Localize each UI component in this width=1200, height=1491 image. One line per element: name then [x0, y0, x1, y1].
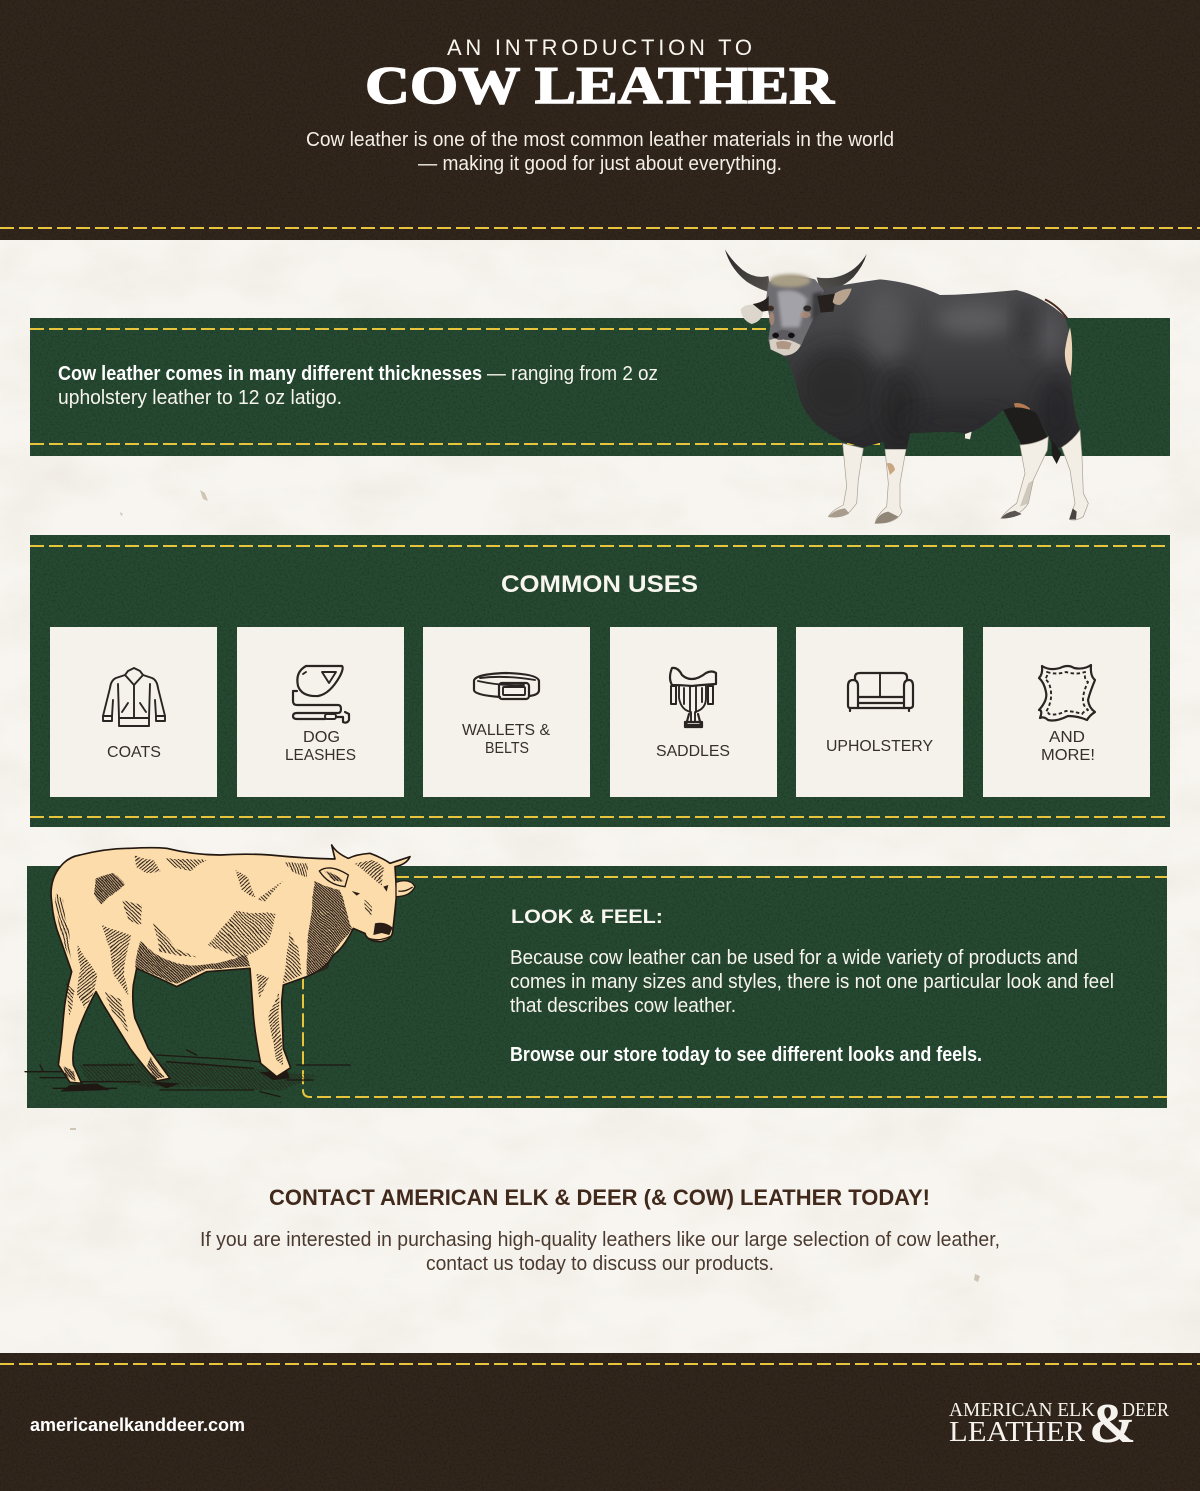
panel: header: [0, 0, 1200, 240]
look and feel body text: [510, 947, 1114, 1066]
paper background: [0, 240, 1200, 1353]
panel: footer: [0, 1353, 1200, 1491]
icon: jacket: [103, 668, 165, 726]
title: COW LEATHER: [365, 57, 835, 115]
card: dog leashes: [237, 627, 404, 797]
card: coats: [50, 627, 217, 797]
label: wallets and belts: WALLETS &: [462, 722, 550, 739]
hind leg right: [1062, 430, 1088, 520]
heading: look and feel: LOOK & FEEL:: [511, 907, 663, 928]
look and feel body text: Browse our store today to see different looks and feels.: [510, 1044, 982, 1066]
contact text: If you are interested in purchasing high-quality leathers like our large selection of cow leather,: [200, 1229, 1000, 1251]
look and feel body text: Because cow leather can be used for a wide variety of products and: [510, 947, 1078, 969]
panel: thickness: [30, 318, 1170, 456]
icon: belt: [474, 673, 539, 699]
panel: common uses: [30, 535, 1170, 827]
label: wallets and belts: BELTS: [485, 740, 529, 757]
ground shadow: [25, 1050, 350, 1097]
subtitle: [306, 129, 894, 175]
thickness text: — ranging from 2 oz: [487, 363, 658, 385]
ears: [319, 868, 415, 897]
subtitle: — making it good for just about everything.: [418, 153, 782, 175]
hind leg left: [1003, 407, 1047, 445]
icon: leather hide: [1039, 665, 1095, 720]
look and feel body text: that describes cow leather.: [510, 995, 736, 1017]
logo: DEER: [1122, 1399, 1170, 1421]
label: dog leashes: LEASHES: [285, 747, 356, 764]
logo: LEATHER: [949, 1416, 1086, 1448]
label: and more: AND: [1049, 729, 1085, 746]
card: and more: [983, 627, 1150, 797]
label: coats: COATS: [107, 744, 161, 761]
ears: [741, 305, 763, 324]
illustration: engraved cow: [25, 845, 415, 1097]
logo: AMERICAN ELK: [949, 1399, 1096, 1421]
label: and more: MORE!: [1041, 747, 1095, 764]
contact heading: CONTACT AMERICAN ELK & DEER (& COW) LEATHER TODAY!: [269, 1185, 930, 1210]
hatching: [55, 855, 385, 1081]
section: contact: [200, 1185, 1000, 1275]
contact text: contact us today to discuss our products.: [426, 1253, 774, 1275]
card: wallets and belts: [423, 627, 590, 797]
thickness text: upholstery leather to 12 oz latigo.: [58, 387, 342, 409]
title kicker: AN INTRODUCTION TO: [447, 35, 752, 60]
card: saddles: [610, 627, 777, 797]
label: wallets and belts: [462, 722, 550, 757]
look and feel body text: comes in many sizes and styles, there is not one particular look and feel: [510, 971, 1114, 993]
contact text: [200, 1229, 1000, 1275]
logo: &: [1089, 1393, 1136, 1455]
panel: look and feel: [27, 866, 1167, 1108]
thickness text: [58, 363, 658, 409]
head: [766, 276, 824, 356]
label: dog leashes: DOG: [303, 729, 340, 746]
website url: americanelkanddeer.com: [30, 1415, 245, 1435]
label: and more: [1041, 729, 1095, 764]
heading: common uses: COMMON USES: [501, 571, 698, 598]
front legs: [828, 443, 863, 517]
cow body silhouette: [51, 845, 410, 1083]
icon: leash: [293, 666, 349, 723]
subtitle: Cow leather is one of the most common leather materials in the world: [306, 129, 894, 151]
label: saddles: SADDLES: [656, 743, 730, 760]
logo: [949, 1393, 1170, 1455]
icon: sofa: [848, 673, 913, 711]
card: upholstery: [796, 627, 963, 797]
photo: bull: [725, 249, 1088, 523]
label: upholstery: UPHOLSTERY: [826, 738, 933, 755]
icon: saddle: [670, 668, 716, 727]
cow face: [352, 885, 413, 940]
thickness text: Cow leather comes in many different thicknesses: [58, 363, 482, 385]
label: dog leashes: [285, 729, 356, 764]
